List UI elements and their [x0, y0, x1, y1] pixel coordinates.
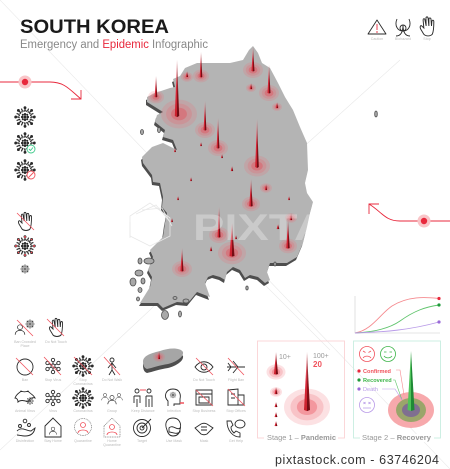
icon: stop offices: [226, 389, 246, 413]
icon: stay home: [44, 418, 62, 443]
map: Jeju island: [143, 348, 183, 373]
icon: target: Target: [137, 439, 147, 443]
icon: stop hand: Stop: [423, 37, 431, 41]
label 100+: 100+: [313, 353, 329, 360]
icon: virus checked: [15, 133, 35, 153]
icon: stop virus: [44, 357, 61, 382]
icon: do not walk: Do Not Walk: [102, 378, 122, 382]
icon: ban: Ban: [22, 378, 28, 382]
icon: caution: Caution: [371, 37, 383, 41]
icon: do not touch: Do Not Touch: [45, 340, 67, 344]
icon: virus blocked: [15, 160, 35, 180]
icon: keep distance: Keep Distance: [131, 409, 155, 413]
icon: stop hand: [420, 17, 434, 41]
icon: home quarantine: [103, 418, 121, 447]
icon: get help: Get Help: [229, 439, 243, 443]
icon: target: [134, 419, 151, 443]
icon: small virus: [21, 265, 29, 273]
icon: home quarantine: Home: [107, 439, 117, 443]
small islands: [130, 111, 377, 320]
panel: stage 2 recovery: [354, 341, 440, 442]
subtitle: Emergency and Epidemic Infographic: [20, 39, 208, 51]
icon: virus: [46, 390, 60, 413]
label 10+: 10+: [279, 354, 291, 361]
icon: do not touch eye: Do Not Touch: [193, 378, 215, 382]
title: SOUTH KOREA: [20, 17, 169, 38]
medium spike: [266, 352, 286, 380]
icon: quarantine: Quarantine: [74, 439, 92, 443]
icon: flight ban: [227, 358, 245, 382]
icon: no touch hand: [17, 212, 34, 230]
icon: use mask: [166, 418, 182, 443]
icon: do not walk: [102, 357, 122, 382]
panel: stage 1 pandemic: [258, 341, 344, 442]
stage 1 caption: Stage 1 – Pandemic: [267, 435, 336, 442]
icon: group: [102, 393, 122, 413]
icon: use mask: Use Mask: [166, 439, 182, 443]
icon: quarantine: [74, 418, 92, 443]
icon: virus: [15, 107, 35, 127]
icon: ban crowded place: Ban Crowded: [14, 340, 36, 344]
icon: stop coronavirus: [73, 356, 93, 386]
green spike: [408, 351, 414, 411]
icon: mask: [195, 423, 213, 443]
curve: recovered: [355, 305, 439, 333]
icon: virus: Virus: [49, 409, 57, 413]
PIXTA watermark: [130, 203, 328, 248]
arrow: right red: [369, 204, 450, 228]
icon: red virus: [15, 236, 35, 256]
icon: do not touch eye: [193, 358, 215, 382]
icon: ban crowded place: [14, 320, 36, 348]
icon: ban crowded place: Place: [20, 344, 30, 348]
label 20: 20: [313, 360, 322, 369]
face: happy green: [380, 346, 396, 362]
icon: caution: [368, 20, 386, 41]
curve: death: [355, 322, 439, 333]
icon: stop coronavirus: Stop: [79, 378, 87, 382]
icon grid: [14, 318, 246, 447]
icon: do not touch: [45, 318, 67, 344]
icon: coronavirus: [73, 388, 93, 413]
icon: coronavirus: Coronavirus: [73, 409, 93, 413]
curve: confirmed: [355, 298, 439, 333]
arrow: left red: [0, 76, 81, 99]
icon: disinfection: [16, 419, 35, 443]
icon: home quarantine: Quarantine: [103, 443, 121, 447]
legend: Death: [363, 387, 378, 393]
icon: stop virus: Stop Virus: [45, 378, 61, 382]
icon: stop coronavirus: Coronavirus: [73, 382, 93, 386]
icon: biohazard: [395, 19, 411, 41]
concentric rings: [388, 392, 434, 428]
icon: animal virus: Animal Virus: [15, 409, 35, 413]
case rings: [148, 62, 297, 277]
legend: Confirmed: [363, 369, 392, 375]
face: neutral purple: [360, 398, 374, 412]
icon: stop offices: Stop Offices: [226, 409, 246, 413]
stage 2 caption: Stage 2 – Recovery: [362, 435, 431, 442]
icon: flight ban: Flight Ban: [228, 378, 244, 382]
legend: [357, 369, 392, 393]
legend: Recovered: [363, 378, 392, 384]
leader lines: [382, 370, 404, 400]
PIXTA watermark: PIXTA: [193, 207, 328, 248]
icon: mask: Mask: [200, 439, 208, 443]
line chart: [355, 296, 441, 333]
icon: group: Group: [107, 409, 117, 413]
small spikes: [270, 387, 282, 426]
icon: stay home: Stay Home: [44, 439, 62, 443]
icon: animal virus: [15, 391, 35, 413]
icon: biohazard: Biohazard: [395, 37, 411, 41]
map of South Korea: [130, 46, 377, 320]
footer credit: pixtastock.com - 63746204: [275, 453, 439, 467]
icon: disinfection: Disinfection: [16, 439, 34, 443]
icon: infection: Infection: [167, 409, 181, 413]
icon: get help: [227, 420, 245, 443]
icon: keep distance: [131, 389, 155, 413]
icon: infection: [166, 389, 184, 413]
face: sad red: [360, 346, 374, 362]
icon: ban: [16, 358, 33, 382]
case spikes: [155, 47, 292, 271]
icon: stop business: Stop Business: [193, 409, 216, 413]
icon: stop business: [193, 390, 216, 413]
large spike: [284, 352, 330, 425]
